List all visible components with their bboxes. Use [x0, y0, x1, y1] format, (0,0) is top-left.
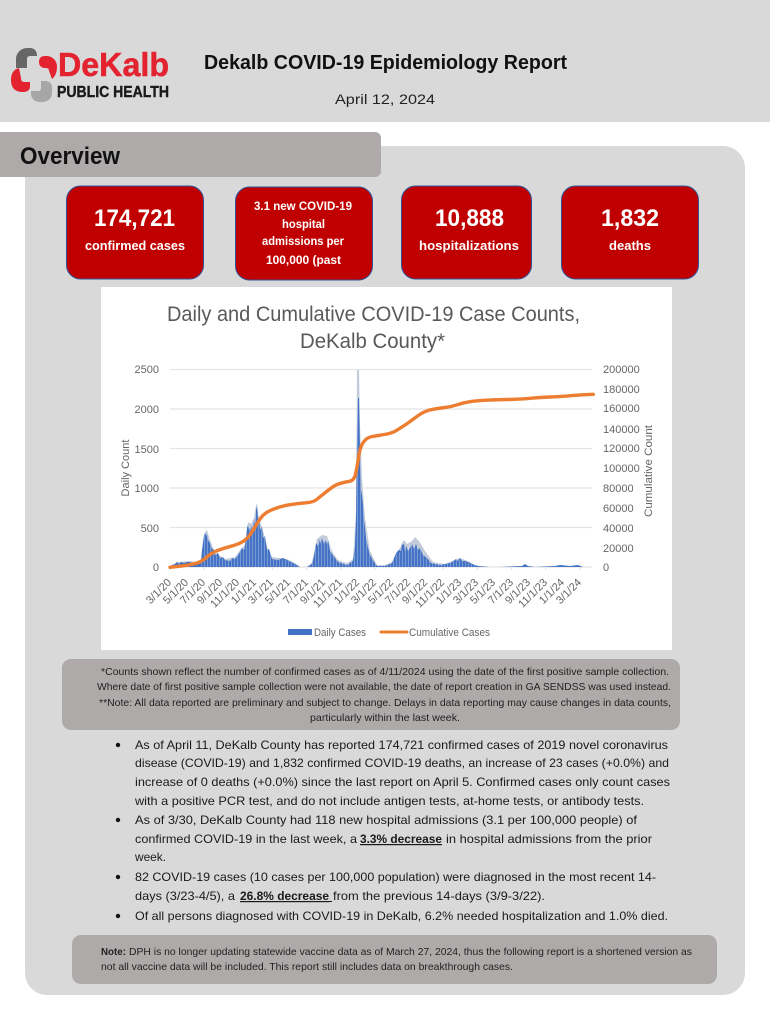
- right axis labels: 60000: [603, 503, 634, 515]
- x axis date labels: [144, 577, 584, 610]
- logo: DeKalb Public Health: [11, 46, 169, 102]
- footnote box: *Counts shown reflect the number of confirmed cases as of 4/11/2024 using the date of the first positive sample collection.: [101, 666, 669, 678]
- card: hospitalizations: [402, 186, 532, 279]
- right axis labels: [603, 364, 640, 574]
- x axis date labels: 3/1/23: [451, 577, 481, 607]
- left axis labels: 2500: [135, 364, 159, 376]
- bullet: totals: [116, 738, 670, 808]
- left axis labels: 500: [141, 523, 159, 535]
- header band: [0, 0, 770, 122]
- x axis date labels: 7/1/20: [178, 577, 208, 607]
- chart title: [167, 303, 580, 353]
- x axis date labels: 7/1/23: [486, 577, 516, 607]
- x axis date labels: 11/1/20: [208, 577, 242, 610]
- bullet: hospital admissions: confirmed COVID-19 in the last week, a: [135, 832, 357, 846]
- card: hospital admissions: 3.1 new COVID-19: [254, 201, 352, 213]
- chart legend: Cumulative Cases: [409, 627, 490, 639]
- card: hospital admissions: admissions per: [262, 236, 344, 248]
- chart title: Daily and Cumulative COVID-19 Case Counts,: [167, 303, 580, 326]
- footnote box: [62, 659, 680, 730]
- x axis date labels: 9/1/21: [298, 577, 328, 607]
- right axis labels: 160000: [603, 403, 640, 415]
- card: hospital admissions: [236, 187, 372, 280]
- bullet list: [116, 738, 670, 923]
- card: deaths: 1,832: [601, 205, 659, 232]
- right axis labels: 80000: [603, 483, 634, 495]
- card: deaths: deaths: [609, 238, 651, 253]
- x axis date labels: 3/1/22: [349, 577, 379, 607]
- x axis date labels: 3/1/24: [554, 577, 584, 607]
- card: confirmed cases: [66, 186, 204, 279]
- chart legend: Daily Cases: [314, 627, 366, 639]
- right axis labels: 0: [603, 562, 609, 574]
- bullet: hospital admissions: [116, 813, 652, 864]
- left axis labels: 1500: [135, 444, 159, 456]
- x axis date labels: 11/1/22: [413, 577, 447, 610]
- bullet: recent cases: 82 COVID-19 cases (10 cases per 100,000 population) were diagnosed in the most recent 14-: [135, 870, 656, 884]
- logo: DeKalb Public Health: PUBLIC HEALTH: [57, 84, 169, 101]
- card: deaths: [562, 186, 698, 279]
- x axis date labels: 11/1/21: [311, 577, 345, 610]
- note box: not all vaccine data will be included. This report still includes data on breakthrough cases.: [101, 961, 513, 973]
- bullet: totals: with a positive PCR test, and do not include antigen tests, at-home tests, or antibody tests.: [134, 794, 644, 808]
- bullet: recent cases: from the previous 14-days (3/9-3/22).: [333, 889, 545, 903]
- bullet: outcomes: Of all persons diagnosed with COVID-19 in DeKalb, 6.2% needed hospitalization and 1.0% died.: [135, 909, 668, 923]
- bullet: recent cases: 26.8% decrease: [240, 889, 329, 903]
- bullet: totals: increase of 0 deaths (+0.0%) since the last report on April 5. Confirmed cases only count cases: [135, 775, 670, 789]
- card: hospital admissions: hospital: [282, 219, 325, 231]
- bullet: hospital admissions: As of 3/30, DeKalb County had 118 new hospital admissions (3.1 per 100,000 people) of: [135, 813, 638, 827]
- bullet: hospital admissions: 3.3% decrease: [360, 832, 442, 846]
- card: hospitalizations: 10,888: [435, 205, 504, 232]
- report date: April 12, 2024: [335, 91, 435, 107]
- right axis labels: 120000: [603, 443, 640, 455]
- bullet: hospital admissions: in hospital admissions from the prior: [446, 832, 652, 846]
- x axis date labels: 3/1/21: [246, 577, 276, 607]
- chart: daily and cumulative case counts: [101, 287, 672, 650]
- left axis labels: 1000: [135, 483, 159, 495]
- footnote box: Where date of first positive sample collection were not available, the date of report creation in GA SENDSS was used instead.: [97, 681, 671, 693]
- x axis date labels: 5/1/22: [366, 577, 396, 607]
- overview heading bar: [0, 132, 381, 177]
- report title: Dekalb COVID-19 Epidemiology Report: [204, 52, 567, 74]
- right axis labels: 40000: [603, 523, 634, 535]
- bullet: totals: disease (COVID-19) and 1,832 confirmed COVID-19 deaths, an increase of 23 cases (+0.0%) and: [135, 756, 669, 770]
- note box: [72, 935, 717, 984]
- footnote box: particularly within the last week.: [310, 712, 460, 724]
- footnote box: **Note: All data reported are preliminary and subject to change. Delays in data reporting may cause changes in data counts,: [99, 697, 671, 709]
- note box: Note:: [101, 946, 126, 958]
- x axis date labels: 1/1/21: [229, 577, 259, 607]
- cumulative cases line: [170, 394, 593, 567]
- left axis labels: 2000: [135, 404, 159, 416]
- x axis date labels: 9/1/20: [195, 577, 225, 607]
- right axis labels: 180000: [603, 384, 640, 396]
- note box: DPH is no longer updating statewide vaccine data as of March 27, 2024, thus the following report is a shortened version as: [129, 946, 692, 958]
- card: confirmed cases: 174,721: [94, 205, 175, 232]
- bullet: recent cases: [116, 870, 656, 903]
- card: hospital admissions: 100,000 (past: [266, 255, 341, 267]
- overview heading bar: Overview: [20, 143, 120, 170]
- right axis labels: 140000: [603, 424, 640, 436]
- x axis date labels: 1/1/22: [332, 577, 362, 607]
- right axis labels: 20000: [603, 543, 634, 555]
- right axis title: Cumulative Count: [643, 425, 655, 517]
- main panel: [25, 146, 745, 995]
- x axis date labels: 1/1/23: [434, 577, 464, 607]
- x axis date labels: 5/1/23: [468, 577, 498, 607]
- bullet: hospital admissions: week.: [134, 850, 166, 864]
- bullet: recent cases: days (3/23-4/5), a: [135, 889, 235, 903]
- x axis date labels: 7/1/21: [281, 577, 311, 607]
- right axis labels: 100000: [603, 463, 640, 475]
- logo: DeKalb Public Health: DeKalb: [58, 46, 169, 83]
- daily cases bars: [170, 370, 592, 567]
- x axis date labels: 3/1/20: [144, 577, 174, 607]
- card: confirmed cases: confirmed cases: [85, 238, 185, 253]
- bullet: totals: As of April 11, DeKalb County has reported 174,721 confirmed cases of 2019 novel coronavirus: [135, 738, 668, 752]
- chart legend: [288, 627, 490, 639]
- right axis labels: 200000: [603, 364, 640, 376]
- x axis date labels: 1/1/24: [537, 577, 567, 607]
- x axis date labels: 9/1/22: [400, 577, 430, 607]
- left axis labels: 0: [153, 562, 159, 574]
- x axis date labels: 11/1/23: [516, 577, 550, 610]
- x axis date labels: 9/1/23: [503, 577, 533, 607]
- x axis date labels: 5/1/21: [263, 577, 293, 607]
- x axis date labels: 7/1/22: [383, 577, 413, 607]
- left axis title: Daily Count: [120, 440, 132, 496]
- left axis labels: [135, 364, 159, 574]
- x axis date labels: 5/1/20: [161, 577, 191, 607]
- card: hospitalizations: hospitalizations: [419, 238, 519, 253]
- chart title: DeKalb County*: [300, 330, 445, 353]
